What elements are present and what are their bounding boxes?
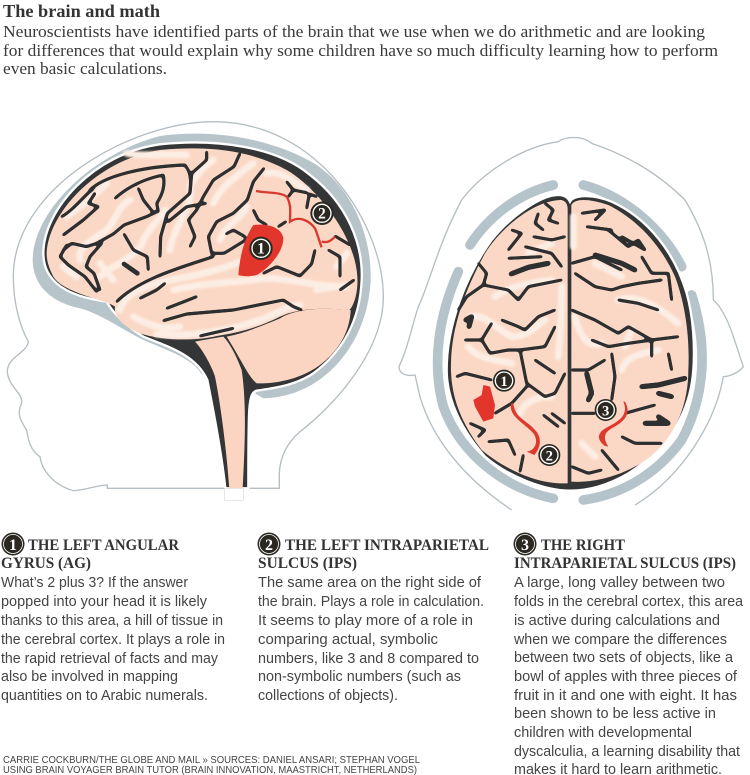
stem connector [225,488,243,500]
skull bands, top view [438,185,702,500]
side view brain illustration [7,122,383,500]
brain stem [195,337,245,488]
body text 1: thanks to this area, a hill of tissue in [1,612,223,629]
red area: left angular gyrus [238,225,283,276]
body text 3: is active during calculations and [514,612,720,629]
intro text: for differences that would explain why some children have so much difficulty learning how to perform [3,41,718,60]
marker 2, top view [538,444,560,466]
body text 1: the cerebral cortex. It plays a role in [1,631,225,648]
heading 1: THE LEFT ANGULAR [28,537,179,554]
red sulcus 2, top view [511,403,540,455]
body text 3: when we compare the differences [513,631,727,648]
number badge 1: 1 [9,537,17,554]
body text 3: children with developmental [514,724,692,741]
left hemisphere [451,200,568,483]
body text 2: comparing actual, symbolic [258,631,438,648]
dark brain cavity, top view [447,195,694,491]
marker 2, side view [310,202,334,225]
body text 3 [513,574,744,775]
number badge 2: 2 [265,537,273,554]
body text 1: also be involved in mapping [1,668,178,685]
marker 1, top view [493,370,515,392]
source credit: CARRIE COCKBURN/THE GLOBE AND MAIL » SOURCES: DANIEL ANSARI; STEPHAN VOGEL [3,754,420,766]
gyri highlights, top view [468,217,678,457]
body text 1 [1,574,225,704]
heading 2: THE LEFT INTRAPARIETAL [285,537,489,554]
marker 1, side view: 1 [257,241,265,258]
dark brain cavity [43,142,362,488]
body text 1: quantities on to Arabic numerals. [1,687,208,704]
body text 3: between two sets of objects, like a [514,649,734,666]
skull band, side view [33,134,371,398]
sulci, side view [60,152,354,336]
body text 2: collections of objects). [258,687,398,704]
body text 1: What’s 2 plus 3? If the answer [1,574,188,591]
marker 1, top view: 1 [500,374,508,390]
thick sulci, top view [466,255,685,423]
body text 3: folds in the cerebral cortex, this area [514,593,744,610]
column 1: the left angular gyrus [1,532,225,704]
red area 1, top view [473,385,495,422]
number badge 2 [258,532,280,556]
cerebellum [227,309,351,383]
body text 3: dyscalculia, a learning disability that [514,743,741,760]
body text 3: fruit in it and one with eight. It has [514,687,737,704]
column 2: the left intraparietal sulcus [258,532,489,704]
right hemisphere [571,200,689,482]
body text 3: A large, long valley between two [514,574,725,591]
red sulcus 3, top view [599,402,628,447]
gyri highlights [63,153,347,335]
top view brain illustration [399,137,743,510]
column 1: the left angular gyrus: GYRUS (AG) [1,555,91,572]
column 3: the right intraparietal sulcus: INTRAPARIETAL SULCUS (IPS) [514,555,736,572]
red line: left intraparietal sulcus [256,191,335,247]
number badge 3 [514,532,536,556]
column 3: the right intraparietal sulcus [513,532,744,775]
number badge 3: 3 [521,537,529,554]
title: The brain and math [3,1,160,21]
intro text: even basic calculations. [3,59,167,78]
body text 2: the brain. Plays a role in calculation. [258,593,484,610]
head outline, top view [399,137,743,510]
body text 2: non-symbolic numbers (such as [258,668,461,685]
marker 3, top view: 3 [602,403,609,419]
thick sulcus [124,264,137,273]
marker 1, side view [249,237,273,260]
body text 1: the rapid retrieval of facts and may [1,650,218,667]
body text 2: It seems to play more of a role in [258,612,473,629]
body text 3: bowl of apples with three pieces of [514,668,738,685]
body text 3: been shown to be less active in [514,705,716,722]
intro text [3,22,718,78]
head outline, side view [7,122,383,491]
marker 2, side view: 2 [318,206,326,223]
column 2: the left intraparietal sulcus: SULCUS (IPS) [258,555,357,572]
sulci, top view [457,203,678,473]
body text 2 [258,574,484,704]
cerebrum [47,148,357,339]
heading 3: THE RIGHT [541,537,625,554]
marker 3, top view [595,399,617,421]
marker 2, top view: 2 [546,448,553,464]
intro text: Neuroscientists have identified parts of the brain that we use when we do arithmetic and are looking [3,22,706,41]
body text 2: The same area on the right side of [258,574,482,591]
source credit [3,754,420,775]
body text 2: numbers, like 3 and 8 compared to [258,650,479,667]
number badge 1 [2,532,24,556]
body text 1: popped into your head it is likely [1,593,207,610]
